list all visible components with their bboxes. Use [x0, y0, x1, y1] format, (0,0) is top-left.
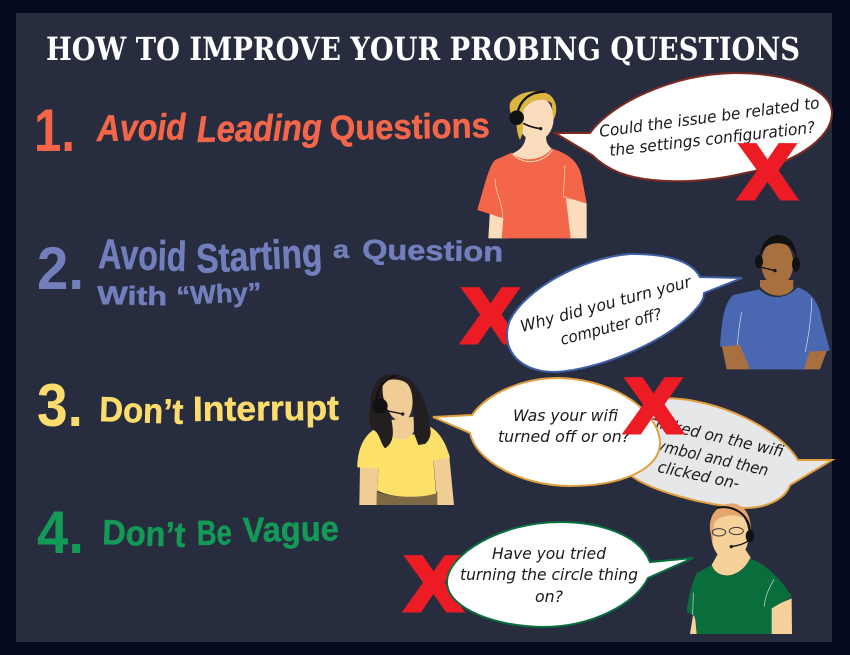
- speech bubble 4: turning the circle thing: [460, 565, 638, 584]
- person 2: agent in blue shirt: [720, 235, 830, 369]
- heading 2: avoid starting a question with why: a: [333, 236, 350, 264]
- red X for bubble 4: X: [406, 542, 461, 627]
- number 2: 2.: [37, 235, 84, 302]
- heading 2: avoid starting a question with why: [97, 229, 503, 311]
- person 1: agent in orange shirt: [477, 91, 587, 238]
- heading 4: don't be vague: Don’t: [102, 513, 186, 555]
- speech bubble 1: Could the issue be related to: [598, 93, 821, 141]
- number 1: 1.: [34, 97, 75, 164]
- heading 2: avoid starting a question with why: Starting: [195, 229, 323, 282]
- heading 2: avoid starting a question with why: With: [97, 280, 167, 311]
- number 4: 4.: [37, 499, 84, 566]
- speech bubble 3: Was your wifi: [513, 406, 619, 425]
- speech bubble 1: [555, 73, 832, 181]
- red X for bubble 1: X: [740, 130, 795, 215]
- speech bubble 2: Why did you turn your: [518, 272, 694, 336]
- speech bubble 2: computer off?: [558, 304, 664, 349]
- heading 3: don't interrupt: Don’t: [99, 390, 184, 432]
- speech bubble 4: on?: [535, 587, 564, 606]
- speech bubble 2: [507, 254, 742, 372]
- heading 1: avoid leading questions: Leading: [196, 107, 322, 150]
- speech bubble 1: the settings configuration?: [608, 118, 817, 160]
- grey customer speech bubble: symbol and then: [647, 434, 770, 480]
- heading 4: don't be vague: Vague: [242, 509, 339, 550]
- heading 2: avoid starting a question with why: “Why”: [176, 277, 262, 311]
- red X for bubble 2: X: [463, 274, 518, 359]
- speech bubble 4: Have you tried: [492, 544, 607, 563]
- heading 3: don't interrupt: Interrupt: [193, 389, 339, 429]
- heading 2: avoid starting a question with why: Avoid: [98, 230, 187, 280]
- person 4: agent in green shirt: [687, 503, 792, 634]
- speech bubble 3: [433, 378, 660, 486]
- heading 4: don't be vague: [102, 509, 339, 555]
- heading 1: avoid leading questions: Avoid: [96, 106, 187, 149]
- red X for bubble 3: X: [626, 364, 681, 449]
- number 3: 3.: [37, 372, 83, 439]
- heading 4: don't be vague: Be: [196, 513, 232, 553]
- grey customer speech bubble: [620, 398, 832, 508]
- grey customer speech bubble: I clicked on the wifi: [637, 409, 786, 461]
- person 3: agent in yellow shirt: [357, 374, 454, 505]
- heading 1: avoid leading questions: Questions: [329, 106, 490, 148]
- heading 1: avoid leading questions: [96, 106, 490, 150]
- speech bubble 3: turned off or on?: [498, 427, 630, 446]
- heading 2: avoid starting a question with why: Question: [362, 234, 503, 267]
- speech bubble 4: [447, 522, 693, 627]
- heading 3: don't interrupt: [99, 389, 339, 432]
- grey customer speech bubble: clicked on-: [656, 457, 741, 493]
